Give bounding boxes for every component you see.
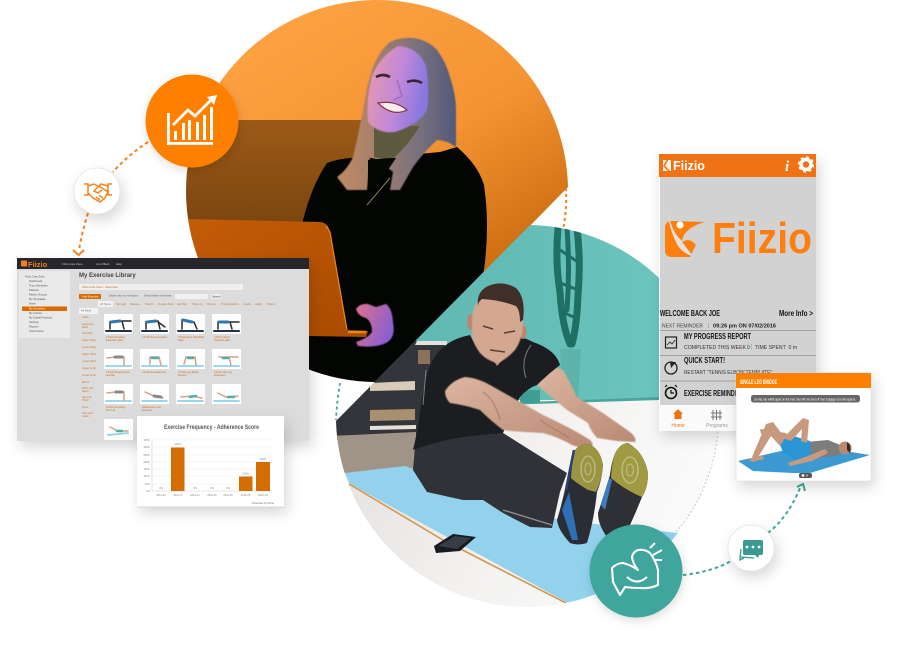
sidebar menu <box>19 271 70 338</box>
bar chart: 2014-11 <box>173 493 183 497</box>
mat <box>738 445 870 473</box>
card title: SINGLE LEG BRIDGE <box>740 379 777 386</box>
welcome row: WELCOME BACK JOE <box>660 309 720 318</box>
body part list: Ankle <box>82 315 89 319</box>
right ear <box>520 325 526 339</box>
next reminder row: NEXT REMINDER <box>662 324 703 330</box>
body part list: Thigh <box>82 398 89 402</box>
hair <box>478 283 524 322</box>
home icon <box>673 409 683 419</box>
sidebar menu: Patients <box>29 288 39 292</box>
bar chart: 100% <box>242 472 250 476</box>
exercise thumbnails <box>104 314 241 440</box>
settings gear icon <box>799 157 813 172</box>
page heading: My Exercise Library <box>79 273 136 279</box>
sidebar menu: Patient Groups <box>29 292 48 296</box>
progress report row: 0 <box>747 345 750 351</box>
bar chart: 250% <box>143 453 151 457</box>
phone on mat <box>434 534 476 553</box>
exercise captions: Extension <box>214 373 226 377</box>
app header: Fiizio <box>673 159 705 173</box>
app header <box>659 154 816 177</box>
sidebar menu: My Articles <box>29 311 43 315</box>
Fiizio logo <box>665 213 812 263</box>
sidebar menu: My Templates <box>29 297 46 301</box>
quick start row <box>665 356 772 376</box>
exercise captions: 4 Point Hover <box>214 335 230 339</box>
panel: man stretching photo <box>336 225 678 607</box>
category tabs: Strength <box>116 302 127 306</box>
bar chart: 100% <box>143 474 151 478</box>
dark mat figures <box>106 320 239 331</box>
top navigation bar: Fiizio Care Zone <box>62 262 83 266</box>
body part list: Hand <box>82 389 89 393</box>
top navigation bar <box>17 258 309 269</box>
category tabs: Fat Mob <box>177 302 187 306</box>
exercise captions: 4 Point Kneeling <box>106 335 125 339</box>
filter row: Add Exercise <box>82 294 99 298</box>
progress report row: TIME SPENT 0 m <box>755 345 797 351</box>
arm <box>788 449 828 466</box>
body part list: Shoulder <box>82 331 93 335</box>
left shoe <box>557 444 603 544</box>
exercise captions: Opposite Hips <box>214 338 231 342</box>
breadcrumb <box>79 284 243 290</box>
light mat figures <box>106 357 239 435</box>
quick start row: QUICK START! <box>684 356 725 365</box>
category tabs: Plant Up <box>192 302 203 306</box>
body part list: Hip and <box>82 395 92 399</box>
bar chart: 300% <box>175 442 182 446</box>
bar chart: 0% <box>146 489 151 493</box>
shirt <box>413 335 560 450</box>
sidebar menu: Subscription <box>29 329 44 333</box>
woman's collar <box>368 158 396 186</box>
hanging plant <box>557 228 579 344</box>
sidebar menu: My Digital Products <box>29 316 53 320</box>
woman's nose shadow <box>393 80 402 100</box>
bar chart: 300% <box>143 445 151 449</box>
bar chart: 0% <box>193 486 198 490</box>
top navigation bar: Joe Affleck <box>96 262 110 266</box>
torso <box>806 440 840 459</box>
bar chart: 0% <box>159 486 164 490</box>
man's head <box>467 283 526 366</box>
far arm <box>537 368 635 442</box>
filter row: Show hidden exercises <box>144 294 172 298</box>
orange background <box>180 0 575 390</box>
bar chart: 2015-01 <box>207 493 217 497</box>
connector: teal dotted lines with arrow <box>683 484 805 575</box>
sidebar menu: My Exercises <box>29 307 46 311</box>
filter row: Search <box>212 294 221 298</box>
crossed leg <box>783 418 809 443</box>
exercise captions: 4 Point Kneeling Arm <box>142 370 166 374</box>
body part list: All Parts <box>81 308 92 312</box>
exercise captions: and Hip <box>106 373 115 377</box>
bar chart: 2015-04 <box>258 493 268 497</box>
left ear <box>467 314 473 330</box>
bar chart: 2015-02 <box>223 493 233 497</box>
exercise captions: Exercise <box>142 408 153 412</box>
body part list: Foot and <box>82 411 93 415</box>
supporting leg <box>752 422 785 459</box>
icon: chat bubbles badge <box>728 525 774 571</box>
bar chart <box>143 438 274 505</box>
bottom navigation: Programs <box>706 423 728 429</box>
bar chart: 0% <box>210 486 215 490</box>
woman's face <box>368 46 428 132</box>
exercise captions: Abdominals Curl <box>142 405 161 409</box>
sofa <box>186 120 370 258</box>
face <box>472 298 523 363</box>
exercise reminders row <box>665 385 746 398</box>
instruction pill: Lie flat, hip width apart on the mat, then lift one foot off mat. Engage core throughout. <box>754 398 856 402</box>
pants <box>413 433 567 528</box>
body part list: Upper Body <box>82 338 97 342</box>
connector: orange dotted lines with arrow <box>73 142 148 255</box>
exercise captions: Flexion <box>178 373 187 377</box>
body part list: Knee <box>82 405 89 409</box>
body part list: Neck <box>82 325 89 329</box>
breadcrumb: Fiizio Care Zone > Exercises <box>82 285 118 289</box>
category tabs: Agility <box>255 302 263 306</box>
bar chart: 50% <box>145 482 151 486</box>
icon: flexed muscle badge <box>590 524 682 618</box>
body part list: Wrist and <box>82 386 94 390</box>
quick start row: RESTART "TENNIS ELBOW TEMPLATE" <box>684 370 772 376</box>
near arm <box>445 377 593 448</box>
panel: exercise frequency chart card <box>137 416 284 507</box>
body part list: Lower Back <box>82 359 97 363</box>
laptop <box>187 219 368 340</box>
filter row <box>79 294 221 299</box>
Fiizio logo: Fiizio <box>712 214 812 263</box>
progress report row: COMPLETED THIS WEEK <box>684 345 747 351</box>
head <box>838 442 852 454</box>
chart title: Exercise Frequency - Adherence Score <box>164 425 260 431</box>
programs icon <box>711 410 722 420</box>
panel: desktop exercise library screenshot <box>17 258 309 441</box>
connector: orange dotted line right of portrait <box>563 188 566 230</box>
info icon: i <box>785 159 790 175</box>
hair silhouette <box>337 38 456 190</box>
panel: single leg bridge exercise card <box>736 373 871 481</box>
body part list: Lower Limb <box>82 373 96 377</box>
bar chart: 150% <box>143 467 151 471</box>
woman's body <box>300 147 487 390</box>
card header <box>736 373 871 388</box>
category tabs: Cardio <box>243 302 251 306</box>
bar chart: 2015-03 <box>241 493 251 497</box>
category tabs: Others <box>267 302 276 306</box>
panel: woman with laptop photo <box>180 0 575 390</box>
top navigation bar: Fiizio <box>28 260 48 269</box>
sidebar menu: Reports <box>29 324 39 328</box>
body part list: Ankle <box>82 414 89 418</box>
filter row: Show only my exercises <box>109 294 138 298</box>
body part list: Lower Body <box>82 345 97 349</box>
exercise captions: 4 Point Knee Shoulder <box>178 335 204 339</box>
pagination pill <box>799 473 812 478</box>
body part list: Head and <box>82 322 94 326</box>
exercise captions <box>106 335 232 412</box>
exercise captions: 4 Point Knee to Hover <box>142 335 168 339</box>
category tabs: All Types <box>100 302 112 306</box>
progress report row <box>666 332 797 351</box>
floor <box>336 400 664 607</box>
exercise captions: 4 Point Kneeling Arm <box>106 370 130 374</box>
app body <box>660 177 816 405</box>
top navigation bar: Help <box>116 262 122 266</box>
woman's hand <box>356 304 394 347</box>
woman's smile <box>378 102 407 112</box>
bar chart: 200% <box>143 460 151 464</box>
supporting foot <box>749 455 764 462</box>
sidebar menu: Fiizio Care Zone <box>25 274 45 278</box>
welcome row: More Info > <box>779 309 813 318</box>
exercise captions: 4 Point Leg Raise <box>178 370 199 374</box>
body part list <box>79 308 98 418</box>
exercise captions: 4 Point Hip Leg <box>214 370 232 374</box>
exercise reminders row: EXERCISE REMINDERS <box>684 389 746 398</box>
welcome row <box>660 309 813 318</box>
wood floor left <box>337 432 416 473</box>
facial features <box>483 326 515 352</box>
necklace <box>367 178 390 205</box>
yoga mat <box>345 466 678 603</box>
furniture <box>330 341 445 440</box>
sidebar menu: Settings <box>29 320 39 324</box>
teal wall <box>356 225 659 400</box>
body part list: Upper Back <box>82 352 97 356</box>
neck <box>494 360 503 366</box>
bar chart: 2014-10 <box>156 493 166 497</box>
connector: thin dashed line below phone <box>676 432 718 532</box>
icon: growth chart badge <box>146 74 238 168</box>
sidebar menu: Dashboard <box>29 279 43 283</box>
bottom navigation <box>659 405 816 431</box>
sidebar menu: Team Members <box>29 284 48 288</box>
category tabs: Release <box>130 302 140 306</box>
progress report row: MY PROGRESS REPORT <box>684 332 751 341</box>
shorts <box>778 435 812 460</box>
plant pot <box>560 349 581 400</box>
exercise captions: Taps <box>178 338 184 342</box>
category tabs: Fixation Mob <box>158 302 174 306</box>
connector: teal dotted line between photos <box>336 383 340 420</box>
body part list: Elbow <box>82 380 89 384</box>
bottom navigation: Home <box>671 423 685 429</box>
panel: mobile app screenshot <box>659 154 816 431</box>
bar chart: Powered by Fiizio <box>252 501 274 505</box>
bar chart: 0% <box>226 486 231 490</box>
bar chart: 200% <box>260 457 267 461</box>
exercise captions: Arm Lift <box>106 408 115 412</box>
exercise illustration <box>738 418 870 473</box>
sidebar menu: News <box>29 302 36 306</box>
woman's neck <box>374 124 420 159</box>
next reminder row: 09:26 pm ON 07/02/2016 <box>713 324 776 330</box>
bar chart: 350% <box>143 438 151 442</box>
category tabs: Stretch <box>145 302 154 306</box>
crossed ankle <box>760 429 788 439</box>
woman's eyes <box>376 75 422 83</box>
body part list: Upper Limb <box>82 366 96 370</box>
next reminder row <box>662 323 776 330</box>
icon: handshake badge <box>74 168 120 214</box>
exercise captions: Extension Hips <box>106 338 124 342</box>
category tabs: Proprioception <box>221 302 239 306</box>
category tabs <box>98 301 276 307</box>
bar chart: 2014-12 <box>190 493 200 497</box>
right shoe <box>598 443 648 537</box>
category tabs: Posture <box>207 302 217 306</box>
exercise captions: 4 Point Kneeling <box>106 405 125 409</box>
